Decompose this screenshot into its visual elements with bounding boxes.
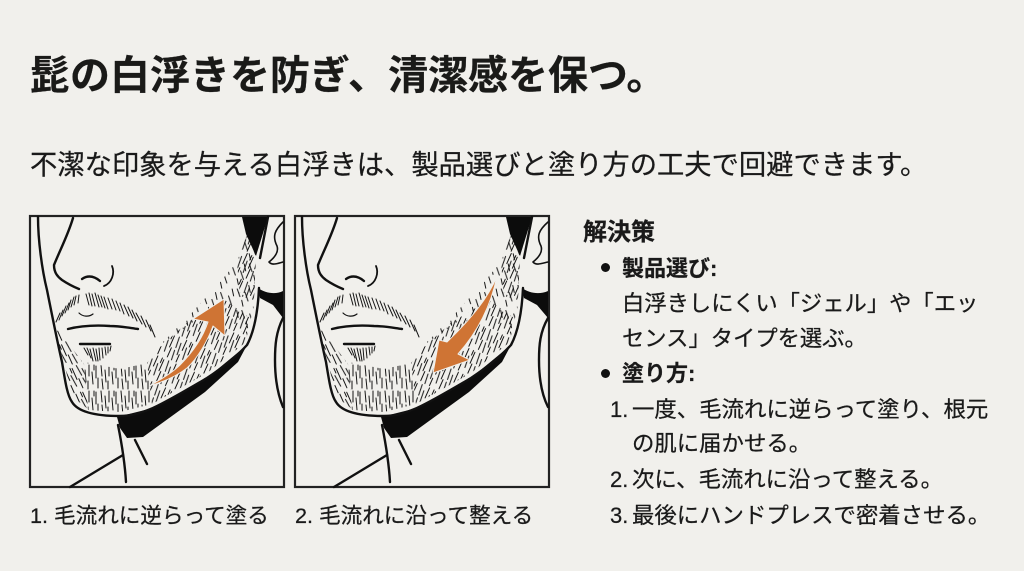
icon: orange arrow down <box>433 276 497 373</box>
subtitle: 不潔な印象を与える白浮きは、製品選びと塗り方の工夫で回避できます。 <box>30 149 927 180</box>
step 3: 最後にハンドプレスで密着させる。 <box>632 503 990 528</box>
solutions list <box>583 219 990 528</box>
icon: orange arrow up <box>149 299 225 386</box>
beard stubble <box>318 232 521 412</box>
step 1 number: 1. <box>610 397 628 422</box>
step 1 line 1: 一度、毛流れに逆らって塗り、根元 <box>632 397 988 422</box>
bullet dot <box>601 369 610 378</box>
bullet: product choice: 製品選び: <box>622 256 717 281</box>
caption 1: 1. 毛流れに逆らって塗る <box>30 503 269 528</box>
product choice body line 2: センス」タイプを選ぶ。 <box>622 326 867 351</box>
step 2 number: 2. <box>610 467 628 492</box>
heading: solutions: 解決策 <box>583 219 655 246</box>
step 2: 次に、毛流れに沿って整える。 <box>632 467 943 492</box>
panel 1: against the grain <box>30 216 284 487</box>
beard stubble <box>54 232 257 412</box>
product choice body line 1: 白浮きしにくい「ジェル」や「エッ <box>622 291 978 316</box>
title: 髭の白浮きを防ぎ、清潔感を保つ。 <box>30 54 666 98</box>
bullet: application: 塗り方: <box>622 361 695 386</box>
face outline <box>38 217 283 487</box>
jaw shadow and hair <box>381 217 548 438</box>
step 1 line 2: の肌に届かせる。 <box>632 431 811 456</box>
jaw shadow and hair <box>117 217 283 438</box>
panel 2: with the grain <box>295 216 549 487</box>
caption 2: 2. 毛流れに沿って整える <box>295 503 533 528</box>
step 3 number: 3. <box>610 503 628 528</box>
bullet dot <box>601 263 610 272</box>
face outline <box>302 217 548 487</box>
